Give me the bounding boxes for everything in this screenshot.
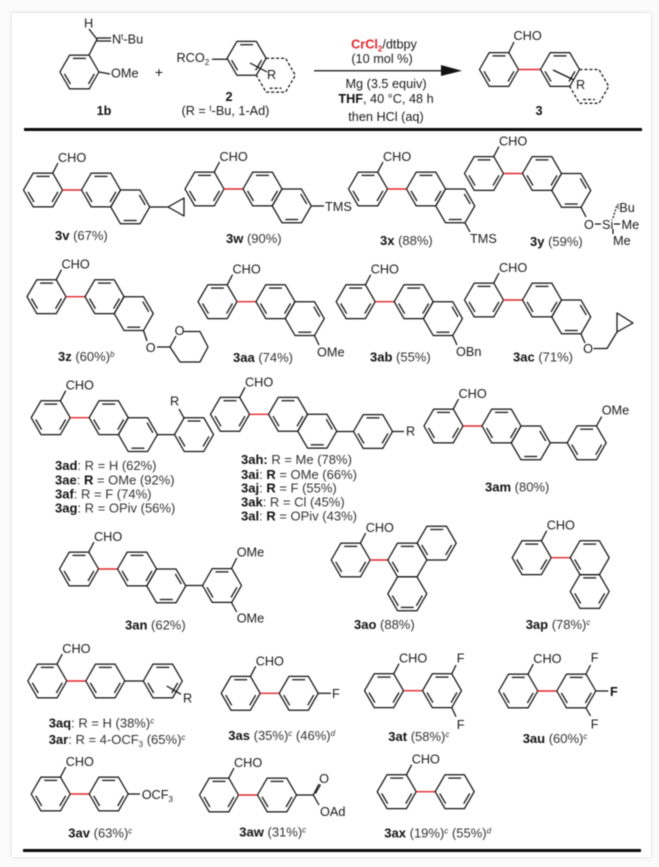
compound 3z: CHO	[62, 258, 90, 272]
compounds 3ad-3ag	[31, 379, 214, 515]
compounds 3ad-3ag: R	[170, 395, 179, 409]
compound 3x: TMS	[470, 232, 497, 246]
conditions below arrow: Mg (3.5 equiv)	[345, 77, 427, 91]
compound 3y: Me	[622, 218, 639, 232]
compound 3av: 3	[168, 795, 173, 804]
compound 3at: c	[445, 730, 449, 739]
compound 3w: 3w (90%)	[226, 231, 282, 246]
compound 3y: O	[584, 218, 594, 232]
compound 3ax: d	[487, 826, 492, 835]
conditions below arrow: THF, 40 °C, 48 h	[338, 92, 434, 106]
compounds 3ah-3al: 3aj: R = F (55%)	[241, 481, 337, 496]
compounds 3aq and 3ar: 3ar: R = 4-OCF	[49, 732, 139, 747]
compound 3an: OMe	[237, 546, 264, 560]
compound 3w: CHO	[220, 150, 248, 164]
compound 3ab: OBn	[456, 345, 481, 359]
compounds 3aq and 3ar: c	[181, 733, 185, 742]
compound 3aa: OMe	[317, 346, 344, 360]
substrate 2: (R =	[182, 104, 206, 118]
compounds 3ah-3al: CHO	[245, 375, 273, 389]
compound 3am: OMe	[602, 403, 629, 417]
substrate 2: 2	[225, 90, 233, 104]
compound 3ap: 3ap (78%)	[526, 617, 586, 632]
bottom rule	[23, 849, 641, 852]
compound 3v: 3v (67%)	[55, 228, 108, 243]
compound 3au: c	[583, 732, 587, 741]
compound 3aw: O	[319, 772, 329, 786]
compounds 3ah-3al: R	[406, 425, 415, 439]
compound 3as: 3as (35%)	[228, 728, 288, 743]
substrate 1b: 1b	[97, 104, 112, 118]
substrate 1b: OMe	[111, 67, 138, 81]
compound 3aw: 3aw (31%)	[239, 825, 302, 840]
substrate 2: RCO	[176, 51, 205, 65]
compound 3av: CHO	[66, 755, 94, 769]
substrate 1b	[60, 17, 143, 118]
compound 3z	[27, 258, 208, 364]
reaction scheme	[60, 17, 609, 124]
compounds 3ah-3al: 3ak: R = Cl (45%)	[241, 495, 345, 510]
compound 3aa: 3aa (74%)	[233, 350, 293, 365]
compounds 3ah-3al: 3al: R = OPiv (43%)	[241, 509, 357, 524]
compound 3ax: 3ax (19%)	[384, 825, 444, 840]
compound 3at: F	[457, 718, 465, 732]
compound 3as: c	[288, 729, 292, 738]
compound 3at: 3at (58%)	[388, 729, 445, 744]
compound 3ap: CHO	[547, 519, 575, 533]
compound 3ax: c	[444, 826, 448, 835]
compound 3z: b	[110, 350, 115, 359]
reaction arrow	[314, 65, 462, 76]
compound 3at: F	[457, 651, 465, 665]
compound 3an: OMe	[237, 611, 264, 625]
compound 3as: F	[332, 687, 340, 701]
compound 3au: 3au (60%)	[523, 731, 583, 746]
compound 3v: CHO	[58, 151, 86, 165]
compound 3aa	[198, 263, 344, 365]
compound 3ap: c	[586, 618, 590, 627]
compound 3aw: c	[302, 826, 306, 835]
compound 3av	[31, 755, 173, 840]
compound 3as: d	[331, 729, 336, 738]
compound 3v	[24, 151, 184, 243]
product 3	[480, 29, 609, 118]
compound 3an: 3an (62%)	[125, 617, 186, 632]
compound 3y: CHO	[499, 134, 527, 148]
compound 3ax: (55%)	[448, 825, 487, 840]
compound 3w: TMS	[325, 200, 352, 214]
compound 3an: CHO	[94, 530, 122, 544]
product 3: CHO	[514, 29, 542, 43]
compounds 3ah-3al	[210, 375, 415, 524]
compound 3y: t	[617, 202, 620, 211]
substrate 1b: H	[84, 17, 93, 31]
compounds 3ad-3ag: 3ag: R = OPiv (56%)	[55, 500, 175, 515]
compound 3ac	[464, 261, 633, 365]
compound 3av: 3av (63%)	[68, 825, 128, 840]
substrate 2: t	[209, 104, 212, 113]
compound 3z: O	[175, 324, 185, 338]
product 3: 3	[535, 104, 543, 118]
substrate 2	[176, 41, 295, 118]
compound 3an	[60, 530, 264, 632]
compound 3ac: 3ac (71%)	[513, 350, 573, 365]
conditions above arrow: 2	[378, 44, 383, 53]
compound 3ac: CHO	[499, 261, 527, 275]
compound 3y	[464, 134, 639, 249]
compound 3au: CHO	[533, 652, 562, 666]
compound 3as: (46%)	[292, 728, 331, 743]
compound 3am: CHO	[458, 387, 487, 401]
compound 3ao: CHO	[366, 521, 394, 535]
conditions below arrow: then HCl (aq)	[348, 110, 424, 124]
compound 3au: F	[591, 651, 599, 665]
compound 3am: 3am (80%)	[485, 480, 549, 495]
compound 3aa: CHO	[232, 263, 261, 277]
compound 3x: CHO	[383, 150, 411, 164]
compound 3ac: O	[583, 342, 593, 356]
compounds 3ad-3ag: 3ae: R = OMe (92%)	[55, 472, 175, 487]
compounds 3aq and 3ar: 3	[139, 740, 144, 749]
compound 3ax: CHO	[412, 753, 440, 767]
compounds 3aq and 3ar: R	[183, 692, 192, 706]
compound 3at	[364, 651, 465, 744]
compounds 3ah-3al: 3ah: R = Me (78%)	[241, 452, 352, 467]
compound 3y: 3y (59%)	[530, 234, 583, 249]
compound 3au: F	[591, 717, 599, 731]
compound 3au	[499, 651, 618, 746]
compound 3x: 3x (88%)	[380, 233, 433, 248]
compound 3z: O	[146, 341, 156, 355]
conditions above arrow: /dtbpy	[382, 37, 418, 51]
compound 3x	[348, 150, 497, 248]
conditions above arrow: CrCl	[351, 37, 383, 53]
substrate 2: -Bu, 1-Ad)	[212, 104, 269, 118]
compounds 3aq and 3ar: CHO	[62, 642, 91, 656]
compound 3ao: 3ao (88%)	[354, 617, 415, 632]
compound 3ap	[512, 519, 609, 632]
compound 3w	[185, 150, 352, 246]
compound 3ab: CHO	[371, 263, 399, 277]
substrate 1b: -Bu	[123, 32, 143, 46]
compound 3at: CHO	[399, 652, 427, 666]
compound 3aw: OAd	[320, 805, 345, 819]
compounds 3aq and 3ar: 3aq: R = H (38%)	[49, 716, 150, 731]
compound 3y: Si	[602, 218, 613, 232]
top rule	[24, 128, 642, 131]
compound 3av: OCF	[142, 788, 168, 802]
compound 3y: Me	[613, 234, 631, 248]
plus sign: +	[155, 64, 163, 80]
compound 3y: Bu	[619, 201, 635, 215]
compounds 3aq and 3ar: (65%)	[143, 732, 181, 747]
compound 3au: F	[610, 685, 618, 699]
conditions above arrow: (10 mol %)	[351, 52, 413, 66]
compound 3am	[424, 387, 629, 495]
compound 3as: CHO	[256, 654, 284, 668]
product 3: R	[576, 78, 585, 92]
compound 3ax	[377, 753, 492, 840]
conditions above arrow	[351, 37, 418, 66]
compound 3as	[221, 654, 340, 743]
substrate 1b: N	[112, 32, 121, 46]
compounds 3ad-3ag: 3af: R = F (74%)	[55, 486, 151, 501]
compound 3aw	[200, 756, 345, 840]
conditions below arrow	[338, 77, 434, 124]
compounds 3ad-3ag: 3ad: R = H (62%)	[55, 458, 157, 473]
compounds 3ad-3ag: CHO	[66, 379, 94, 393]
substrate 2: R	[267, 68, 276, 82]
compound 3ab	[336, 263, 481, 365]
compounds 3ah-3al: 3ai: R = OMe (66%)	[241, 467, 357, 482]
compounds 3aq and 3ar	[28, 642, 192, 749]
substrate 1b: t	[121, 32, 124, 42]
compound 3z: 3z (60%)	[58, 349, 110, 364]
compound 3aw: CHO	[234, 756, 262, 770]
compound 3ao	[331, 521, 456, 632]
compound 3ab: 3ab (55%)	[370, 350, 431, 365]
compounds 3aq and 3ar: c	[150, 717, 154, 726]
substrate 2: 2	[205, 58, 210, 67]
compound 3av: c	[128, 826, 132, 835]
